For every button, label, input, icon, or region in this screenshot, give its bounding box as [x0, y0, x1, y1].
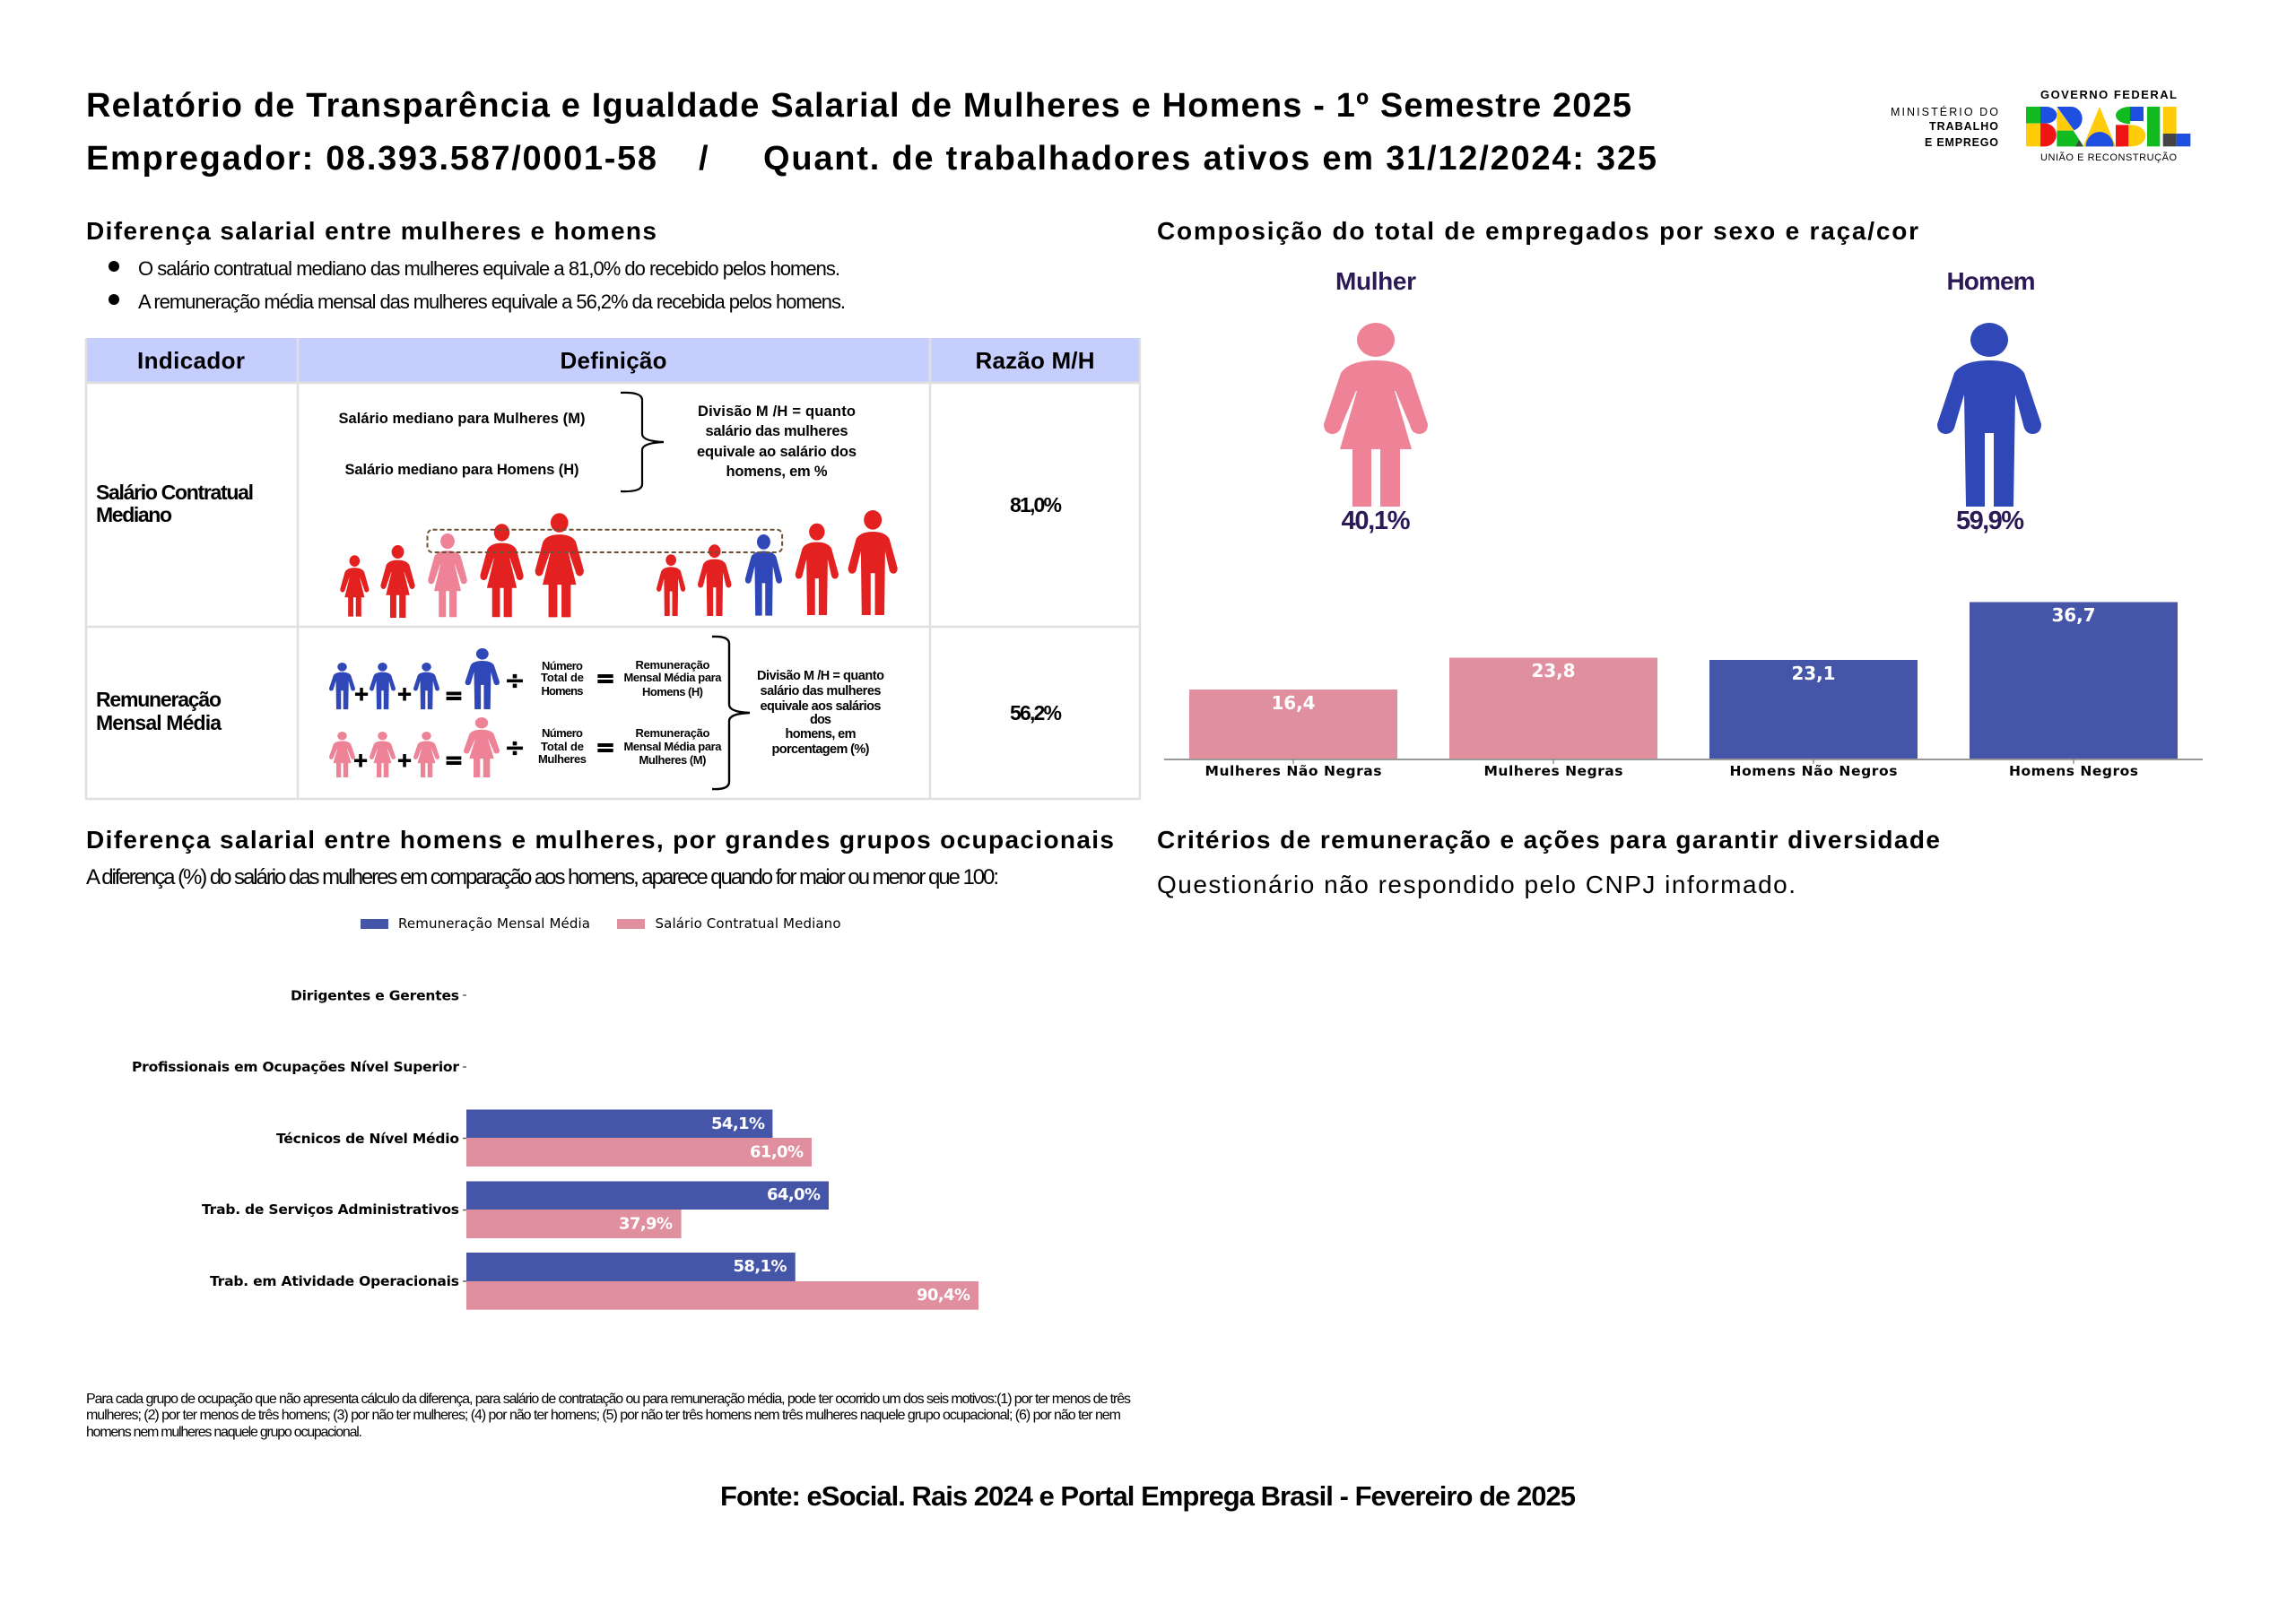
equation: homens: Remuneração	[635, 658, 710, 672]
row: salário contratual mediano: Divisão M /H = quanto	[698, 403, 856, 420]
table header	[137, 347, 1094, 374]
row: remuneração mensal média: Mensal Média	[96, 711, 222, 734]
bar chart: grupos ocupacionais: Trab. em Atividade Operacionais	[210, 1273, 459, 1289]
bar chart: grupos ocupacionais: Trab. de Serviços Administrativos	[202, 1201, 459, 1218]
icon: mulher 40,1%	[1324, 267, 1428, 535]
legend	[361, 915, 841, 932]
logo: ministério e governo federal: UNIÃO E RECONSTRUÇÃO	[2040, 152, 2177, 163]
equation: homens: Homens	[542, 684, 583, 698]
heading: diferença por grupos ocupacionais	[86, 826, 1114, 889]
brace and division note: dos	[810, 713, 831, 727]
brace and division note: equivale aos salários	[761, 699, 881, 714]
row: salário contratual mediano: 81,0%	[1010, 493, 1062, 516]
row: salário contratual mediano: homens, em %	[726, 464, 828, 480]
icon: mulher 40,1%: 40,1%	[1342, 507, 1411, 535]
panel: diferença salarial heading and bullets	[86, 217, 846, 313]
equation: mulheres: =	[445, 747, 463, 773]
logo: ministério e governo federal: GOVERNO FEDERAL	[2040, 88, 2177, 101]
equation: mulheres: Mulheres (M)	[639, 753, 707, 767]
equation: homens: =	[445, 682, 463, 708]
equation: mulheres: Número	[542, 726, 583, 740]
brace and division note: porcentagem (%)	[771, 742, 870, 757]
brace and division note: salário das mulheres	[761, 684, 881, 698]
bar chart: grupos ocupacionais	[132, 988, 978, 1310]
source: Fonte: eSocial. Rais 2024 e Portal Emprega Brasil - Fevereiro de 2025	[720, 1480, 1576, 1512]
logo: ministério e governo federal	[1891, 88, 2190, 163]
bar chart: composição por raça/cor: Homens Negros	[2009, 763, 2138, 779]
panel: critérios de remuneração: Questionário não respondido pelo CNPJ informado.	[1157, 871, 1796, 898]
bar chart: grupos ocupacionais: 54,1%	[711, 1115, 765, 1133]
equation: homens: +	[353, 683, 370, 705]
footnote: Para cada grupo de ocupação que não apresenta cálculo da diferença, para salário de contratação ou para remuneração média, pode ter ocorrido um dos seis motivos:(1) por ter menos de três	[86, 1392, 1131, 1407]
icon: fila de homens com mediana destacada	[657, 510, 898, 616]
equation: homens: +	[396, 683, 413, 705]
equation: homens: Número	[542, 659, 583, 672]
row: remuneração mensal média: Remuneração	[96, 688, 222, 711]
logo: ministério e governo federal: MINISTÉRIO DO	[1891, 105, 1998, 118]
legend: Remuneração Mensal Média	[398, 915, 590, 932]
equation: mulheres: Total de	[541, 740, 584, 753]
row: salário contratual mediano	[96, 393, 1062, 526]
table header: Definição	[560, 347, 667, 374]
equation: mulheres: Remuneração	[635, 726, 710, 740]
footnote: homens nem mulheres naquele grupo ocupacional.	[86, 1425, 362, 1440]
table header: Indicador	[137, 347, 245, 374]
bar chart: grupos ocupacionais: 61,0%	[750, 1142, 804, 1162]
panel: diferença salarial heading and bullets: A remuneração média mensal das mulheres equivale a 56,2% da recebida pelos homens.	[138, 291, 846, 313]
equation: homens: Homens (H)	[642, 685, 703, 698]
row: salário contratual mediano: Salário Contratual	[96, 481, 254, 504]
row: remuneração mensal média	[96, 688, 1062, 734]
footnote: mulheres; (2) por ter menos de três homens; (3) por não ter mulheres; (4) por não ter homens; (5) por não ter três homens nem três mulheres naquele grupo ocupacional; (6) por não ter nem	[86, 1408, 1121, 1423]
row: salário contratual mediano: salário das mulheres	[705, 423, 848, 439]
row: salário contratual mediano: equivale ao salário dos	[697, 444, 857, 460]
equation: homens: Total de	[541, 671, 584, 684]
equation: mulheres: Mulheres	[538, 752, 587, 766]
equation: mulheres: +	[352, 750, 369, 771]
row: salário contratual mediano: Salário mediano para Homens (H)	[344, 462, 579, 478]
equation: homens: Mensal Média para	[624, 671, 722, 684]
panel: diferença salarial heading and bullets: O salário contratual mediano das mulheres equivale a 81,0% do recebido pelos homens.	[138, 257, 840, 280]
table header: Razão M/H	[976, 347, 1094, 374]
title: /	[699, 140, 709, 178]
bar chart: grupos ocupacionais: 58,1%	[734, 1257, 787, 1276]
icon: homem 59,9%: 59,9%	[1956, 507, 2024, 535]
brace and division note	[712, 637, 884, 789]
brace and division note: homens, em	[786, 727, 856, 742]
bar chart: grupos ocupacionais: Profissionais em Ocupações Nível Superior	[132, 1059, 459, 1075]
bar chart: grupos ocupacionais: 64,0%	[767, 1185, 821, 1204]
equation: mulheres: +	[396, 750, 413, 771]
logo: ministério e governo federal: TRABALHO	[1929, 120, 1998, 133]
bar chart: grupos ocupacionais: 90,4%	[917, 1286, 970, 1305]
title: Quant. de trabalhadores ativos em 31/12/2024: 325	[763, 140, 1657, 178]
bar chart: composição por raça/cor: 23,1	[1792, 663, 1835, 684]
panel: critérios de remuneração: Critérios de remuneração e ações para garantir diversidade	[1157, 826, 1940, 854]
icon: fila de mulheres com mediana destacada	[340, 513, 584, 618]
equation: mulheres: Mensal Média para	[624, 740, 722, 753]
heading: diferença por grupos ocupacionais: Diferença salarial entre homens e mulheres, por grandes grupos ocupacionais	[86, 826, 1114, 854]
bar chart: grupos ocupacionais: Dirigentes e Gerentes	[291, 988, 459, 1004]
icon: mulher 40,1%: Mulher	[1335, 267, 1416, 295]
bar chart: composição por raça/cor	[1164, 603, 2203, 779]
icon: homem 59,9%	[1937, 267, 2041, 535]
equation: mulheres	[329, 717, 722, 777]
row: remuneração mensal média: 56,2%	[1010, 701, 1062, 724]
title: Relatório de Transparência e Igualdade Salarial de Mulheres e Homens - 1º Semestre 2025	[86, 87, 1631, 125]
heading: composição: Composição do total de empregados por sexo e raça/cor	[1157, 217, 1918, 245]
icon: homem 59,9%: Homem	[1946, 267, 2036, 295]
heading: diferença por grupos ocupacionais: A diferença (%) do salário das mulheres em comparação aos homens, aparece quando for maior ou menor que 100:	[86, 865, 999, 889]
title	[86, 87, 1657, 178]
title: Empregador: 08.393.587/0001-58	[86, 140, 657, 178]
bar chart: composição por raça/cor: Mulheres Não Negras	[1205, 763, 1381, 779]
bar chart: grupos ocupacionais: 37,9%	[619, 1214, 673, 1234]
panel: critérios de remuneração	[1157, 826, 1940, 898]
panel: tabela indicador definição razão	[86, 338, 1140, 799]
bar chart: composição por raça/cor: 16,4	[1272, 692, 1315, 714]
bar chart: composição por raça/cor: Mulheres Negras	[1483, 763, 1623, 779]
equation: homens: ÷	[504, 665, 526, 695]
legend: Salário Contratual Mediano	[655, 915, 841, 932]
logo: ministério e governo federal: E EMPREGO	[1925, 136, 1998, 149]
equation: mulheres: =	[596, 734, 615, 761]
bar chart: composição por raça/cor: 36,7	[2052, 604, 2095, 626]
footnote	[86, 1392, 1131, 1440]
equation: mulheres: ÷	[504, 733, 526, 762]
panel: diferença salarial heading and bullets: Diferença salarial entre mulheres e homens	[86, 217, 657, 245]
equation: homens: =	[596, 665, 615, 692]
row: salário contratual mediano: Salário mediano para Mulheres (M)	[339, 411, 585, 427]
bar chart: composição por raça/cor: 23,8	[1532, 660, 1575, 681]
brace and division note: Divisão M /H = quanto	[757, 669, 884, 683]
bar chart: composição por raça/cor: Homens Não Negros	[1729, 763, 1898, 779]
row: salário contratual mediano: Mediano	[96, 503, 172, 526]
equation: homens	[329, 648, 722, 709]
dashed median box	[427, 530, 782, 552]
bar chart: grupos ocupacionais: Técnicos de Nível Médio	[276, 1131, 459, 1147]
